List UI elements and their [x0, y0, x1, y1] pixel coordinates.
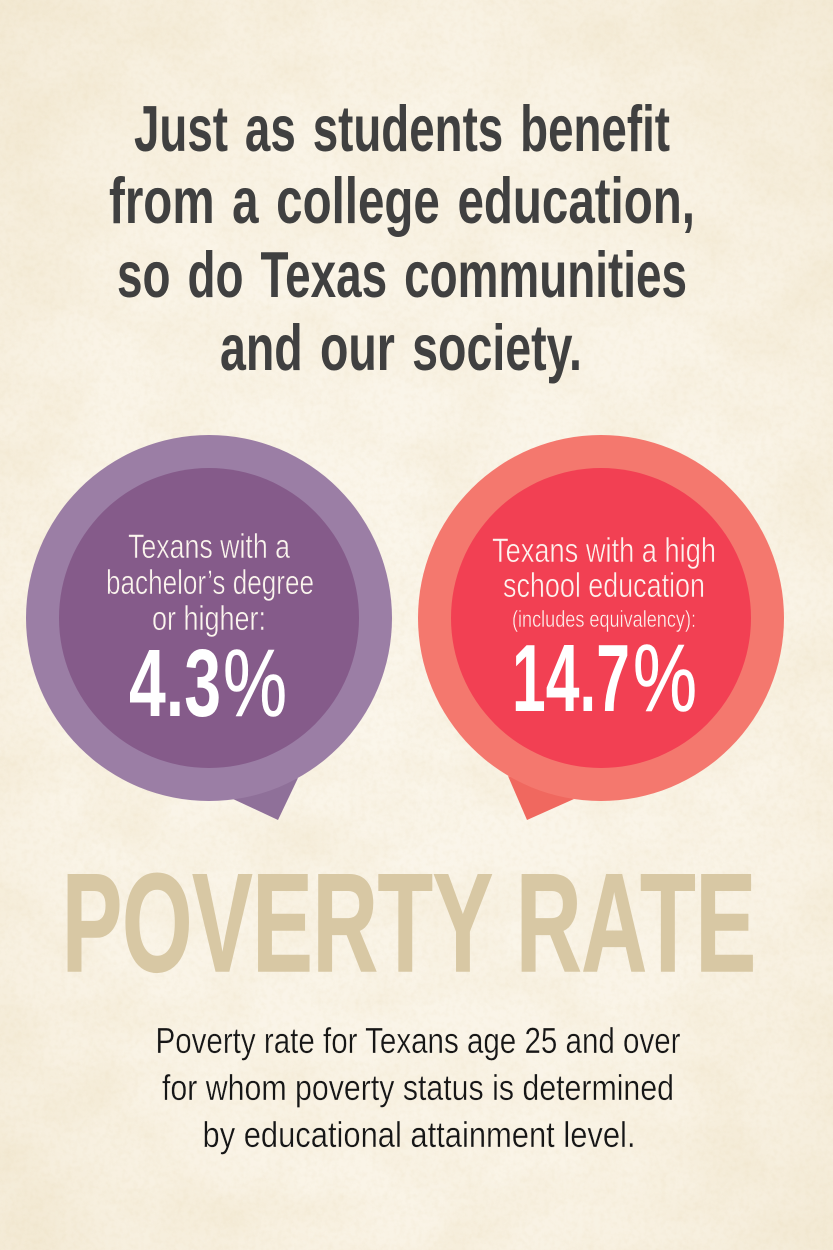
- panel: bachelor's degree poverty rate bubble: [26, 435, 392, 820]
- bubble label: bachelor's degree: bachelor’s degree: [106, 564, 314, 602]
- bubble label: bachelor's degree: Texans with a: [128, 528, 290, 566]
- bubble label: high school education: [492, 532, 716, 632]
- bubble tail: red: [508, 776, 574, 820]
- statistic: 4.3%: %: [223, 630, 287, 737]
- description text: by educational attainment level.: [202, 1114, 636, 1155]
- bubble inner circle: purple: [59, 468, 359, 768]
- bubble label: bachelor's degree: [106, 528, 314, 638]
- bubble label: high school education: Texans with a high: [492, 532, 716, 570]
- description text: for whom poverty status is determined: [162, 1067, 674, 1108]
- description text: Poverty rate for Texans age 25 and over: [156, 1020, 680, 1061]
- heading: poverty rate: POVERTY: [62, 844, 493, 1001]
- panel: high school education poverty rate bubble: [418, 435, 784, 820]
- description text: [156, 1020, 680, 1155]
- bubble label: high school education: school education: [503, 567, 705, 605]
- title: [109, 92, 695, 384]
- bubble label: high school education: (includes equivalency):: [512, 606, 696, 632]
- bubble label: bachelor's degree: or higher:: [152, 600, 266, 638]
- bubble inner circle: red: [451, 468, 751, 768]
- statistic: 14.7%: 14.7: [512, 625, 630, 732]
- statistic: 4.3%: 4.3: [129, 630, 221, 737]
- bubble outer ring: purple: [26, 435, 392, 801]
- statistic: 14.7%: %: [633, 625, 697, 732]
- title: and our society.: [220, 311, 582, 384]
- bubble outer ring: red: [418, 435, 784, 801]
- bubble tail: purple: [233, 778, 298, 820]
